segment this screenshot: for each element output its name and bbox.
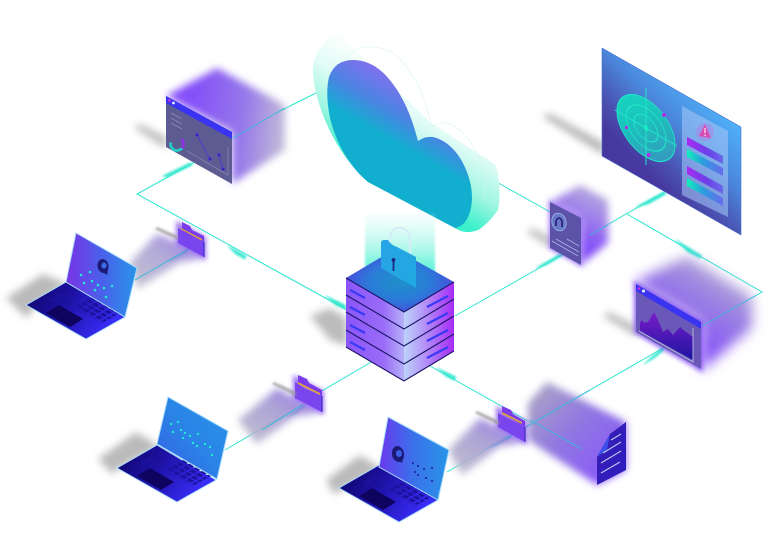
panel: file document <box>597 422 626 485</box>
icon: folder 3 <box>498 406 525 442</box>
panel: file halo <box>528 382 626 485</box>
laptop 2 screen <box>157 397 228 479</box>
panel: document card <box>550 202 581 265</box>
dashboard scatter <box>196 134 224 170</box>
dashboard text lines <box>171 113 182 129</box>
server top <box>346 249 454 312</box>
alert bars <box>687 137 723 164</box>
panel: area chart monitor <box>636 284 701 369</box>
server right face <box>404 282 454 381</box>
connector lines <box>135 86 762 472</box>
server layer lines <box>346 278 454 381</box>
shadow: big screen <box>543 113 604 155</box>
card glow <box>550 202 581 265</box>
panel: document halo <box>550 185 608 265</box>
card body <box>550 202 581 265</box>
laptop 1 data dots <box>80 271 113 298</box>
laptop 3 screen <box>379 417 449 500</box>
icon: folder 1 <box>178 222 204 257</box>
laptop 3 base <box>339 465 438 522</box>
laptop 2 data dots <box>170 421 213 456</box>
laptop 3 avatar <box>391 445 405 463</box>
file text lines <box>601 434 621 473</box>
server left face <box>346 278 404 381</box>
avatar badge <box>550 211 568 233</box>
shadow: laptop 3 <box>326 455 382 494</box>
dashboard header <box>166 96 232 139</box>
laptop 3 data dots <box>412 462 433 482</box>
padlock body <box>381 240 416 288</box>
alert panel <box>682 106 728 217</box>
shadow: top-left dashboard <box>134 124 166 149</box>
server with lock <box>346 214 454 381</box>
icon: cloud <box>313 30 500 232</box>
folder trail 1 <box>130 234 205 289</box>
folder shadow streaks <box>155 227 499 425</box>
glow above lock <box>365 214 435 274</box>
connector highlights <box>163 163 702 449</box>
alert halo <box>696 123 714 141</box>
panel: dashboard halo <box>166 68 285 184</box>
drop shadows <box>6 113 637 494</box>
laptop 1 base <box>26 282 125 339</box>
radar chart <box>617 82 675 174</box>
laptop 1 screen <box>66 233 137 317</box>
folder trail 2 <box>238 388 322 444</box>
monitor header <box>636 284 701 329</box>
folder trail 3 <box>448 418 525 475</box>
area chart <box>640 312 693 360</box>
panel: big radar screen <box>602 48 741 235</box>
panel: monitor glow <box>636 284 701 369</box>
cloud back outline <box>347 47 485 202</box>
alert triangle <box>699 124 711 138</box>
server drive bars <box>350 290 448 358</box>
line segments over halos <box>135 108 755 449</box>
dashboard body <box>166 96 232 184</box>
donut chart <box>171 139 183 151</box>
laptop 2 <box>117 397 228 502</box>
icon: folder 2 <box>295 375 322 412</box>
panel: monitor halo <box>634 256 752 371</box>
shadow: laptop 1 <box>6 274 68 318</box>
laptop 2 base <box>117 445 216 502</box>
cloud extrusion <box>313 30 500 232</box>
shadow: document <box>527 228 551 248</box>
shadow: monitor <box>603 312 637 337</box>
panel: top-left dashboard <box>166 96 232 184</box>
shadow: server <box>310 308 347 346</box>
card text lines <box>552 239 579 256</box>
monitor body <box>636 284 701 369</box>
padlock shackle <box>390 228 410 254</box>
shadow: laptop 2 <box>98 432 160 474</box>
screen face <box>602 48 741 235</box>
keyhole <box>392 258 394 271</box>
laptop 1 <box>26 233 137 339</box>
laptop 1 avatar <box>96 258 110 275</box>
cloud front face <box>327 60 472 228</box>
laptop 3 <box>339 417 449 522</box>
